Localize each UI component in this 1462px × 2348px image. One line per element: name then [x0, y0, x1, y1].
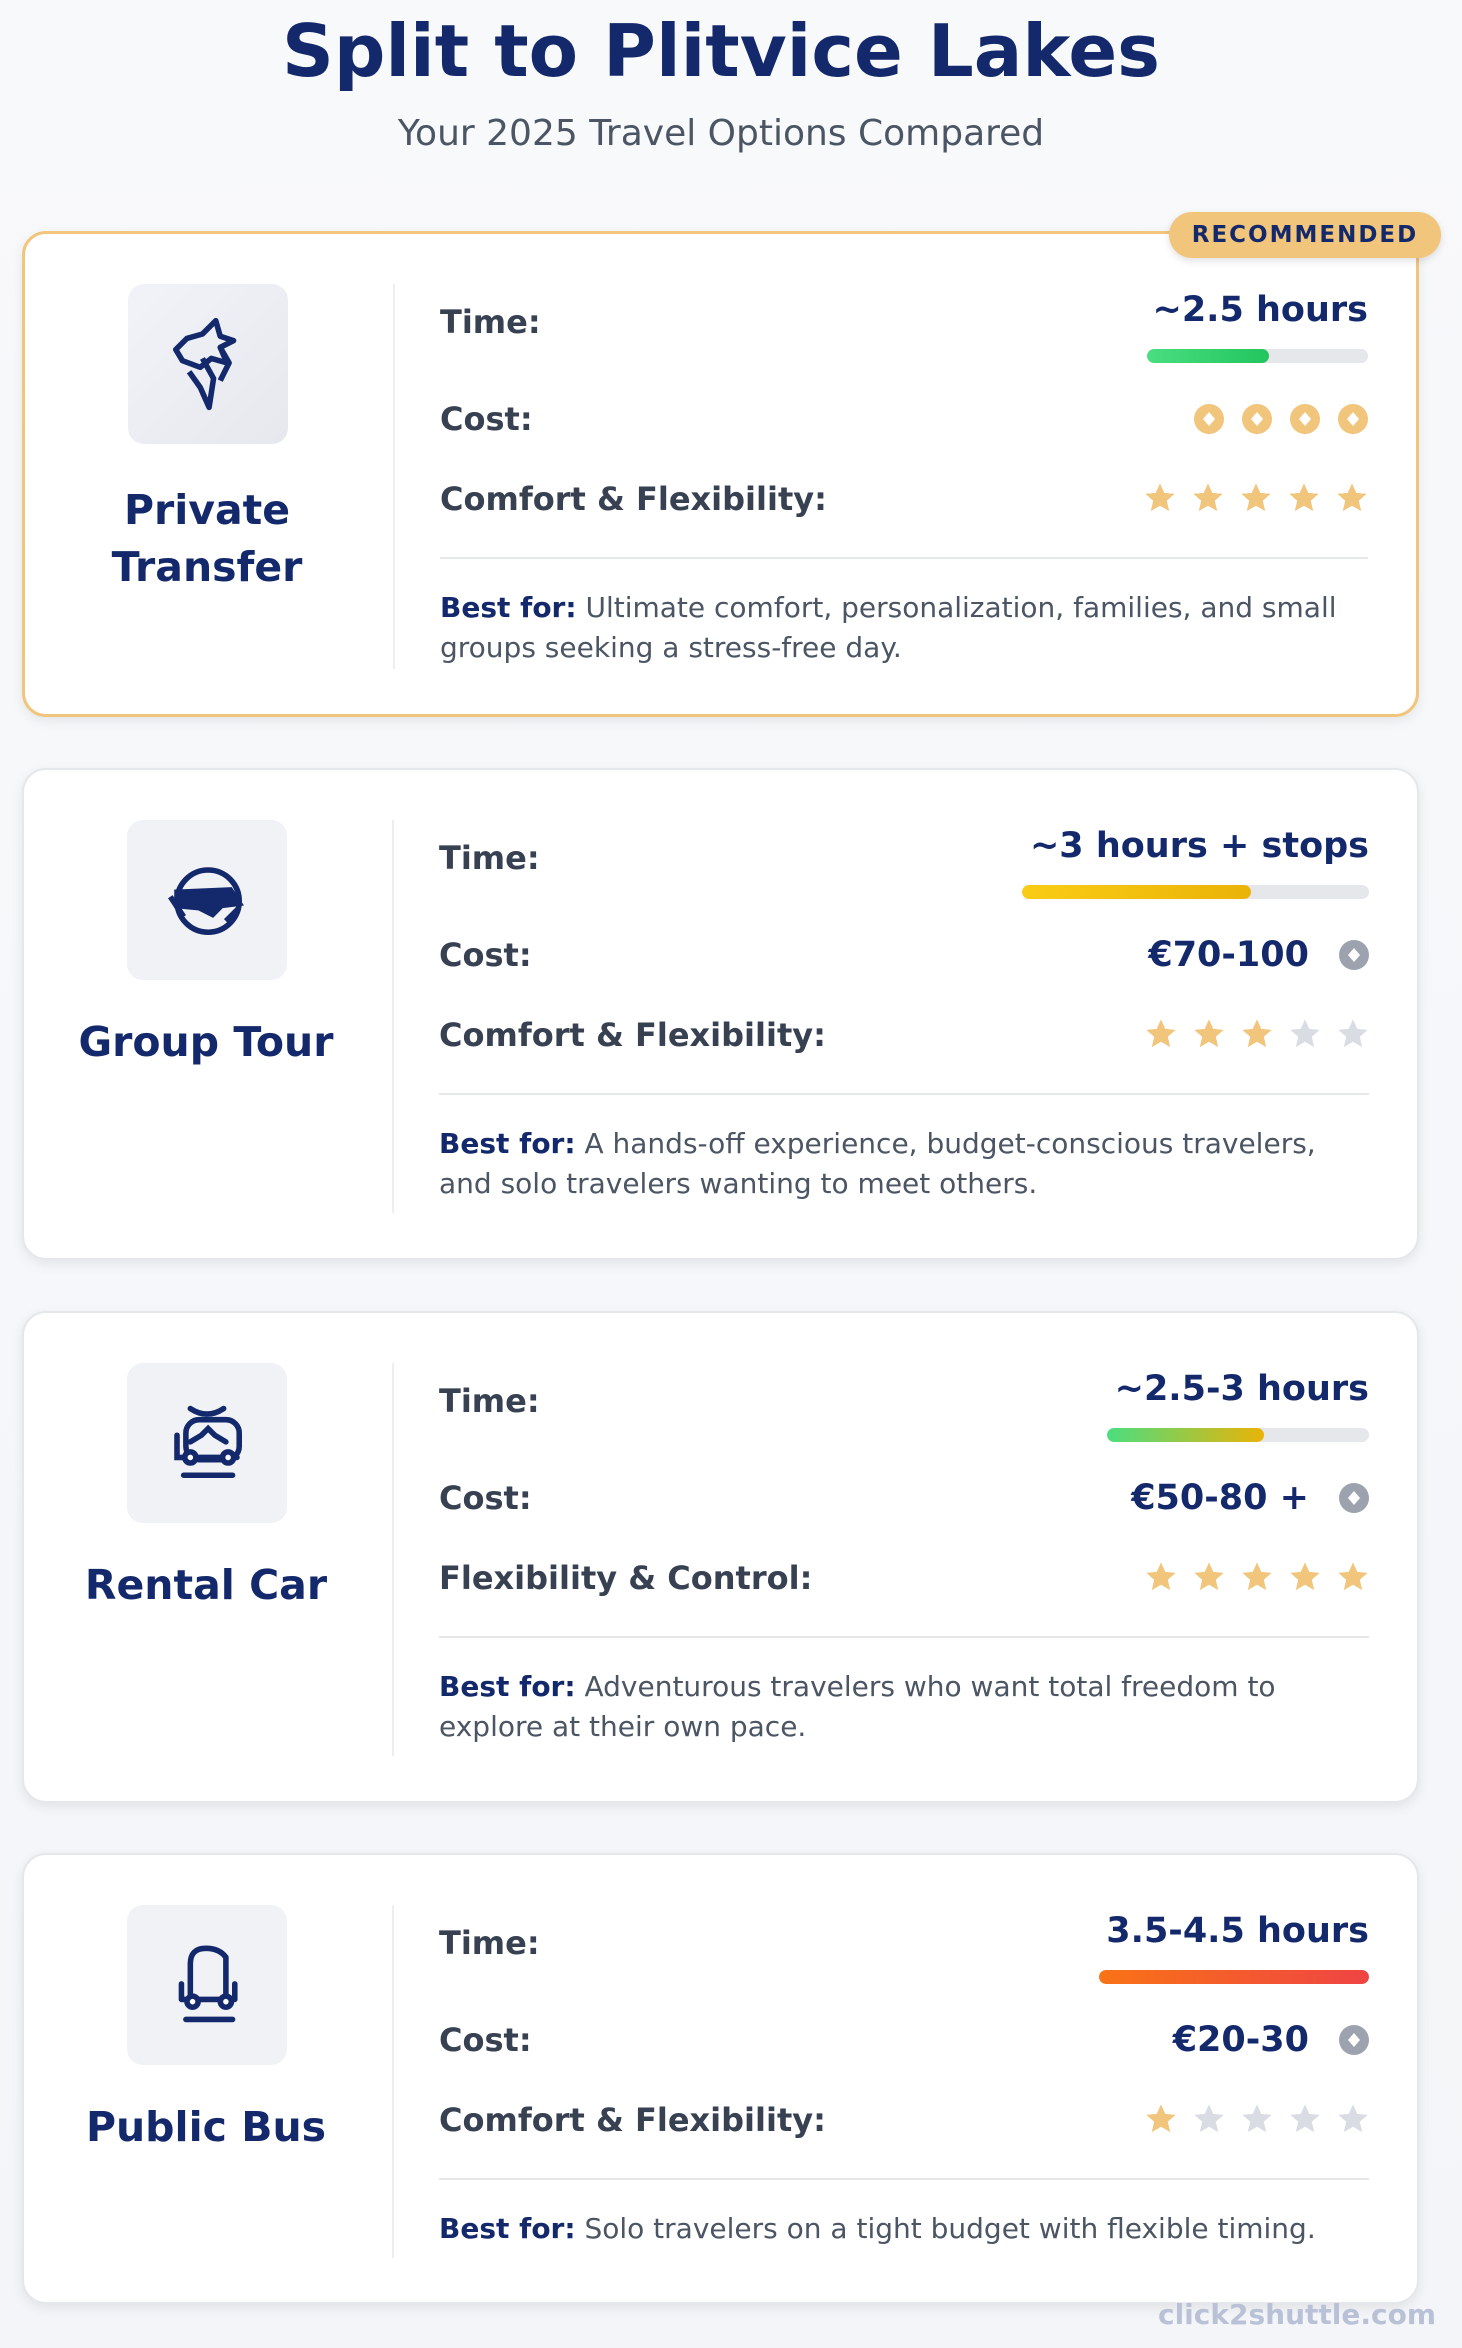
row: time: Time:: [439, 1924, 540, 1962]
row: time: Time:: [439, 839, 540, 877]
badge: recommended: RECOMMENDED: [1192, 222, 1418, 248]
name: Private: [124, 486, 290, 534]
row: cost: Cost:: [439, 2021, 532, 2059]
name: [112, 486, 302, 591]
best for: Best for: Adventurous travelers who want total freedom to explore at their own pace.: [439, 1670, 1276, 1743]
panel: public bus: €20-30: [1173, 2020, 1309, 2060]
panel: public bus: 3.5-4.5 hours: [1106, 1911, 1369, 1951]
name: Transfer: [112, 543, 302, 591]
icon: rental car: [127, 1363, 287, 1523]
best for: Best for: Ultimate comfort, personalization, families, and small groups seeking a stress-free day.: [440, 591, 1336, 664]
row: cost: Cost:: [439, 936, 532, 974]
panel: rental car: [22, 1311, 1419, 1803]
row: comfort: Comfort & Flexibility:: [440, 480, 827, 518]
row: time: Time:: [439, 1382, 540, 1420]
subtitle: Your 2025 Travel Options Compared: [398, 113, 1044, 154]
footer: brand: click2shuttle.com: [1158, 2298, 1436, 2331]
row: cost: Cost:: [440, 400, 533, 438]
panel: rental car: ~2.5-3 hours: [1115, 1369, 1369, 1409]
name: Rental Car: [85, 1561, 327, 1609]
panel: group tour: ~3 hours + stops: [1030, 826, 1369, 866]
best for: Best for: Solo travelers on a tight budget with flexible timing.: [439, 2212, 1316, 2245]
badge: recommended: [1169, 212, 1441, 258]
row: comfort: Comfort & Flexibility:: [439, 2101, 826, 2139]
panel: private transfer: ~2.5 hours: [1152, 290, 1368, 330]
icon: private transfer: [128, 284, 288, 444]
panel: group tour: [22, 768, 1419, 1260]
panel: private transfer: [22, 231, 1419, 717]
row: time: Time:: [440, 303, 541, 341]
row: flexibility: Flexibility & Control:: [439, 1559, 812, 1597]
panel: public bus: [22, 1853, 1419, 2304]
panel: group tour: €70-100: [1148, 935, 1309, 975]
title: Split to Plitvice Lakes: [282, 9, 1160, 93]
row: comfort: Comfort & Flexibility:: [439, 1016, 826, 1054]
best for: Best for: A hands-off experience, budget-conscious travelers, and solo travelers wanting to meet others.: [439, 1127, 1316, 1200]
row: cost: Cost:: [439, 1479, 532, 1517]
name: Group Tour: [79, 1018, 333, 1066]
icon: group tour: [127, 820, 287, 980]
icon: public bus: [127, 1905, 287, 2065]
panel: rental car: €50-80 +: [1131, 1478, 1309, 1518]
name: Public Bus: [86, 2103, 326, 2151]
